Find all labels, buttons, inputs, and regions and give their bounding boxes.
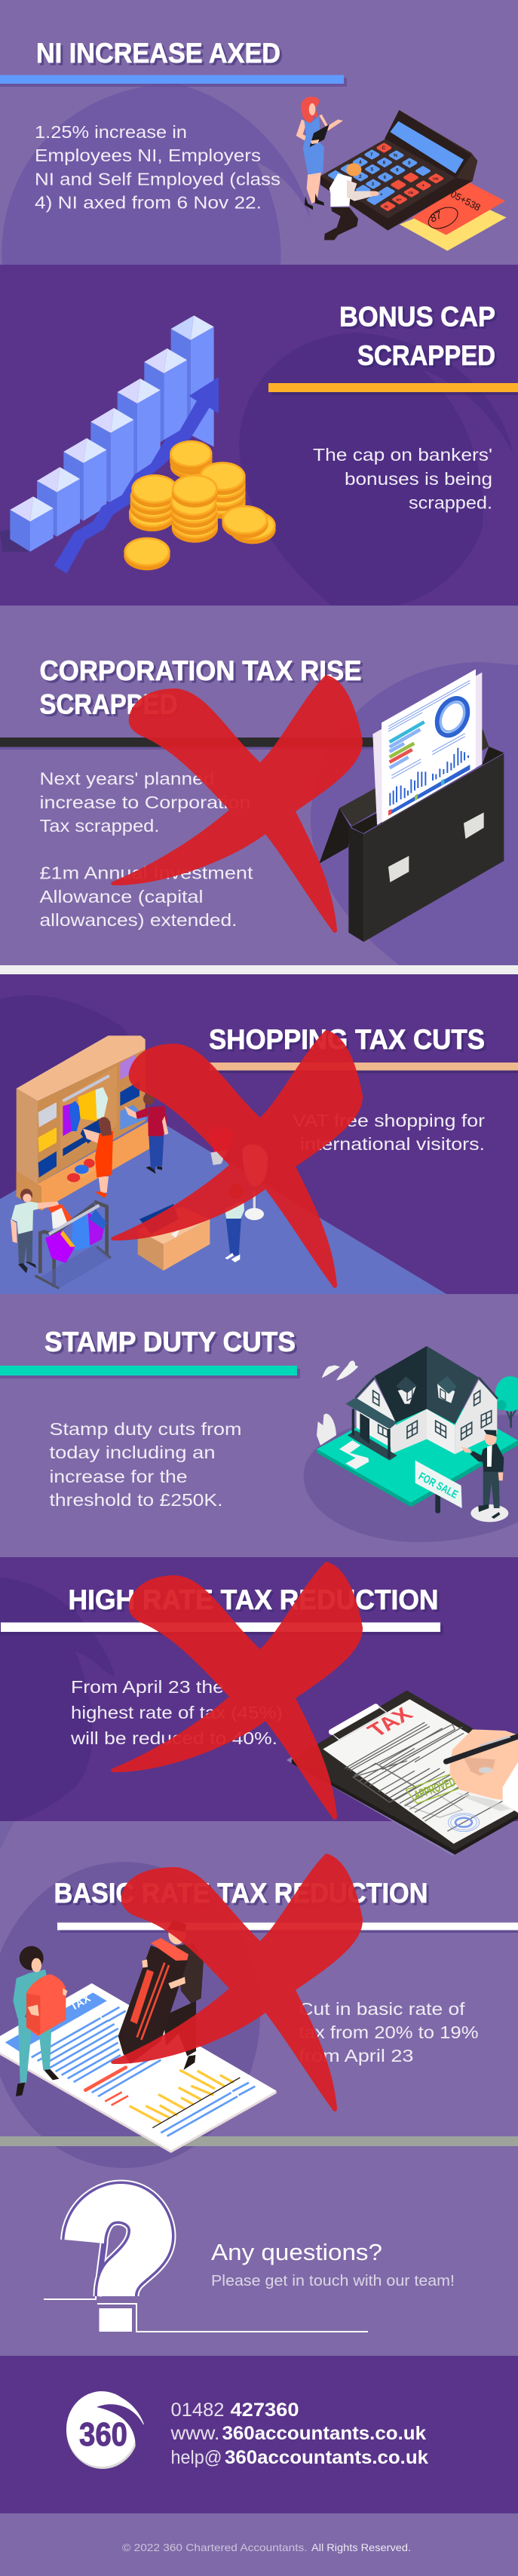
illustration: calculator and people: %: [394, 153, 398, 158]
clip: [329, 1704, 388, 1740]
heading bar: [0, 1366, 300, 1378]
clouds: [322, 1360, 358, 1381]
body text: Tax scrapped.: [39, 816, 159, 836]
body text: international visitors.: [300, 1134, 485, 1154]
body text: VAT free shopping for: [293, 1111, 485, 1130]
illustration: tax document with people and marker: TAX: [69, 1992, 93, 2013]
heading bar: [0, 738, 376, 750]
illustration: signed tax form on clipboard: TAX: [362, 1704, 418, 1740]
body text: scrapped.: [409, 493, 492, 513]
heading bar: [0, 1623, 443, 1635]
body text: Employees NI, Employers: [35, 146, 261, 165]
heading: NI INCREASE AXED: [36, 38, 280, 69]
heading: BASIC RATE TAX REDUCTION: [54, 1878, 428, 1909]
illustration: calculator and people: 4: [359, 160, 362, 165]
illustration: calculator and people: 05+538: [449, 189, 482, 213]
phone: [170, 2400, 299, 2421]
panel: bonus cap scrapped: [0, 302, 518, 574]
body text: [299, 1999, 478, 2065]
house: [345, 1346, 498, 1461]
approved stamp: APPROVED: [412, 1774, 457, 1802]
illustration: briefcase with report: [319, 669, 504, 942]
body text: will be reduced to 40%.: [70, 1728, 277, 1748]
heading: HIGH RATE TAX REDUCTION: [68, 1584, 439, 1615]
illustration: calculator and people: +: [380, 192, 383, 198]
website: www.: [170, 2423, 220, 2444]
footer copyright: © 2022 360 Chartered Accountants.: [122, 2541, 308, 2553]
for sale sign: [415, 1461, 462, 1513]
phone: 427360: [231, 2400, 299, 2421]
body text: NI and Self Employed (class: [35, 169, 280, 189]
body text: Next years' planned: [39, 769, 214, 789]
estate agent: [461, 1430, 508, 1522]
shopper in red dress: [83, 1117, 113, 1198]
website: 360accountants.co.uk: [222, 2423, 426, 2444]
body text: increase for the: [50, 1467, 187, 1486]
arrow: [54, 377, 219, 574]
illustration: tax document with people and marker: [0, 1920, 277, 2153]
heading: SCRAPPED: [357, 340, 495, 371]
lawn: [317, 1389, 518, 1507]
footer copyright: [122, 2541, 411, 2553]
shopper at counter: [225, 1184, 244, 1262]
woman: [296, 97, 343, 210]
logo: 360: [66, 2391, 145, 2469]
man: [324, 163, 379, 240]
heading bar: [57, 1923, 518, 1933]
heading: BONUS CAP: [339, 302, 495, 332]
seal: [448, 1814, 480, 1832]
email: 360accountants.co.uk: [225, 2447, 428, 2468]
heading: STAMP DUTY CUTS: [44, 1326, 296, 1357]
man with marker: [118, 1920, 204, 2070]
for sale sign: FOR SALE: [416, 1470, 460, 1501]
panel: stamp duty cuts: [0, 1326, 518, 1542]
panel: NI increase axed: [0, 38, 507, 251]
red cross: [111, 1030, 363, 1288]
body text: today including an: [50, 1443, 216, 1462]
illustration: calculator and people: M+: [397, 198, 402, 202]
tree and plant: [317, 1376, 518, 1446]
body text: The cap on bankers': [313, 445, 492, 465]
body text: Allowance (capital: [39, 887, 204, 906]
heading: [39, 655, 362, 719]
illustration: calculator and people: 5: [371, 167, 374, 172]
shopper in dark red shirt: [124, 1093, 168, 1174]
illustration: calculator and people: ON: [433, 177, 439, 182]
panel: high rate tax reduction: [0, 1562, 518, 1856]
illustration: calculator and people: 7: [370, 152, 373, 158]
red cross: [111, 1854, 363, 2111]
red cross: [111, 675, 363, 933]
body text: [70, 1677, 283, 1748]
panel: any questions: [44, 2184, 455, 2332]
counter: [138, 1204, 210, 1271]
heading: SCRAPPED: [39, 689, 178, 719]
body text: [50, 1419, 241, 1510]
text: get in touch: Please get in touch with our team!: [211, 2273, 455, 2289]
body text: tax from 20% to 19%: [299, 2022, 478, 2042]
email: help@: [170, 2447, 222, 2468]
body text: allowances) extended.: [39, 910, 237, 930]
hand and pen: [446, 1729, 518, 1813]
body text: 1.25% increase in: [35, 122, 187, 142]
body text: £1m Annual Investment: [39, 863, 253, 882]
coins: [124, 440, 276, 570]
red cross: [111, 1562, 363, 1820]
illustration: calculator and people: 6: [384, 175, 387, 180]
footer copyright: All Rights Reserved.: [311, 2541, 411, 2553]
body text: threshold to £250K.: [50, 1490, 223, 1510]
body text: Cut in basic rate of: [299, 1999, 465, 2019]
body text: [293, 1111, 485, 1154]
illustration: calculator and people: M-: [385, 204, 389, 209]
illustration: calculator and people: 87: [428, 208, 445, 225]
body text: [313, 445, 492, 513]
panel: basic rate tax reduction: [0, 1854, 518, 2153]
body text: [39, 769, 253, 930]
clothes rack: [35, 1201, 111, 1288]
illustration: calculator and people: 9: [396, 168, 399, 173]
heading bar: [210, 1063, 518, 1073]
illustration: calculator and people: 9: [408, 161, 411, 166]
body text: from April 23: [299, 2046, 413, 2065]
floor: [0, 1115, 446, 1294]
dormers: [398, 1386, 416, 1404]
panel: corporation tax rise scrapped: [0, 655, 504, 942]
shopper with hanger: [11, 1188, 73, 1273]
approved stamp: [406, 1774, 462, 1804]
body text: bonuses is being: [345, 469, 492, 489]
panel: shopping tax cuts: [0, 1024, 518, 1294]
illustration: house for sale: [304, 1346, 518, 1542]
body text: 4) NI axed from 6 Nov 22.: [35, 193, 262, 213]
heading: [339, 302, 495, 371]
heading: CORPORATION TAX RISE: [39, 655, 362, 686]
illustration: calculator and people: 3: [372, 182, 375, 187]
illustration: signed tax form on clipboard: [287, 1691, 518, 1856]
illustration: calculator and people: C: [382, 146, 386, 151]
illustration: calculator and people: +: [421, 183, 425, 189]
illustration: calculator and people: [296, 97, 507, 251]
mannequin: [209, 1127, 268, 1220]
icon: question mark: [44, 2184, 368, 2332]
phone: 01482: [170, 2400, 225, 2421]
illustration: rising bars, arrow and coins: [0, 315, 276, 574]
heading bar: [268, 383, 518, 395]
illustration: clothes shop: [11, 1035, 268, 1288]
body text: increase to Corporation: [39, 793, 250, 812]
illustration: calculator and people: CE: [408, 191, 414, 195]
body text: From April 23 the: [71, 1677, 224, 1697]
body text: highest rate of tax (45%): [71, 1703, 283, 1722]
logo: 360: 360: [79, 2416, 127, 2453]
body text: [35, 122, 280, 213]
text: any questions: Any questions?: [211, 2239, 382, 2265]
panel: contact: [66, 2391, 428, 2469]
heading bar: [0, 75, 347, 87]
body text: Stamp duty cuts from: [50, 1419, 241, 1439]
illustration: calculator and people: 2: [359, 174, 362, 179]
illustration: calculator and people: 8: [383, 160, 386, 165]
woman with eraser: [13, 1946, 67, 2096]
heading: SHOPPING TAX CUTS: [209, 1024, 485, 1055]
